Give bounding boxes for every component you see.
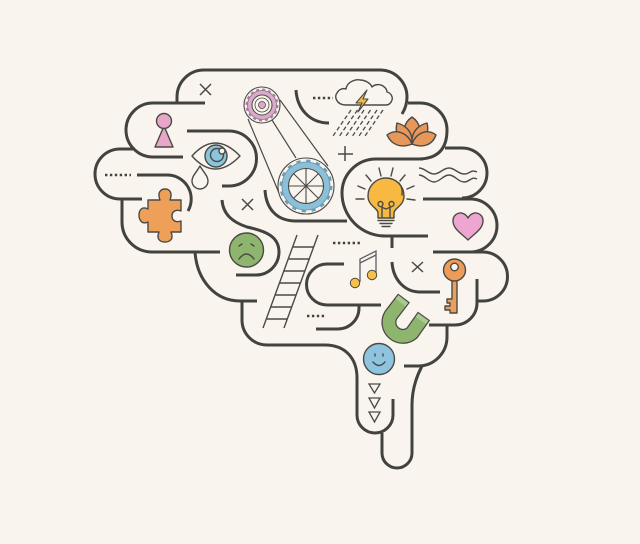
icon: sad face [230, 233, 264, 267]
icon: triangles [369, 384, 380, 422]
icon: light bulb [356, 168, 415, 226]
icon: belt and gears [244, 87, 334, 214]
icon: eye with tear [192, 143, 240, 189]
dotted accents [105, 98, 362, 316]
icon: heart [453, 213, 483, 240]
small gear [244, 87, 280, 123]
icon: happy face [364, 344, 394, 374]
icon: storm cloud [336, 80, 392, 112]
icon: magnet [389, 298, 424, 336]
icon: keyhole pawn [155, 114, 173, 147]
icon: lotus [387, 117, 436, 146]
icon: puzzle piece [139, 189, 181, 242]
icon: waves [419, 168, 477, 182]
rain [333, 110, 383, 136]
brain outline [95, 70, 507, 468]
cross marks [200, 84, 423, 272]
icon: key [444, 259, 466, 313]
icon: ladder [263, 235, 318, 328]
large gear [278, 158, 334, 214]
icon: music note [350, 251, 377, 288]
